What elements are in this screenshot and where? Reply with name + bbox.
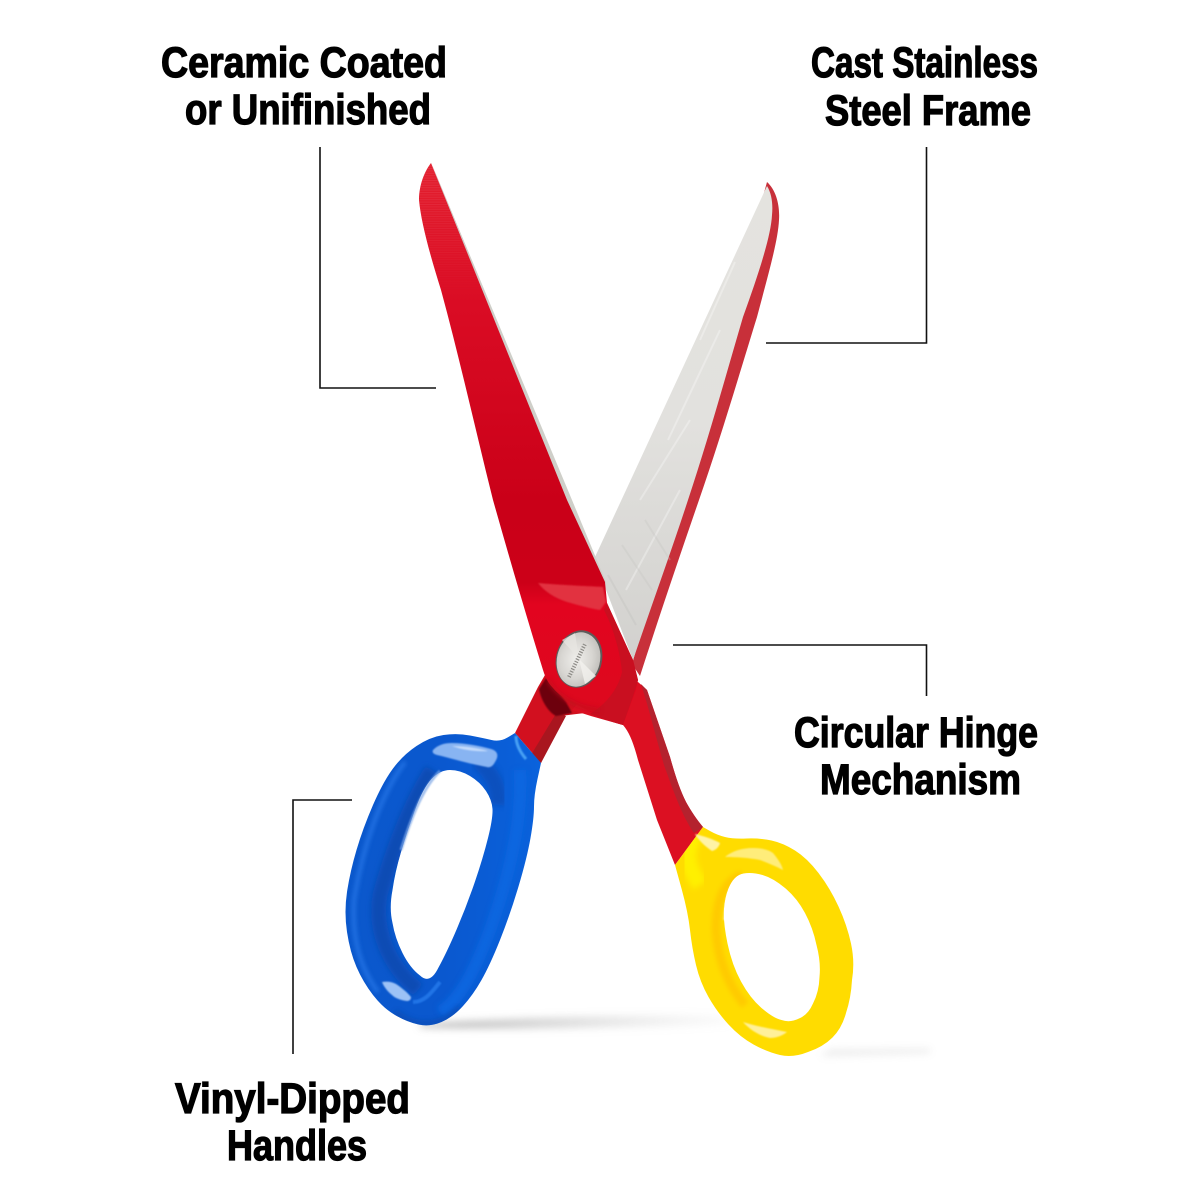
heading: vinyl-dipped: Vinyl-Dipped xyxy=(175,1075,410,1123)
left blade: red body and pivot xyxy=(419,163,638,725)
heading: cast stainless xyxy=(811,39,1038,135)
heading: ceramic coated: or Unifinished xyxy=(185,86,431,134)
right blade: red frame xyxy=(632,182,779,676)
blue handle xyxy=(346,733,541,1025)
leader line: cast stainless xyxy=(766,147,926,343)
blue hole soft edge xyxy=(401,771,440,850)
heading: ceramic coated: Ceramic Coated xyxy=(161,39,447,87)
ground shadow xyxy=(420,1016,930,1056)
heading: vinyl-dipped: Handles xyxy=(227,1122,367,1170)
yellow handle shading xyxy=(688,835,745,1005)
lower red arm xyxy=(572,682,703,865)
leader line: circular hinge xyxy=(673,645,926,696)
pivot shaded side xyxy=(590,603,638,725)
pivot lower bevel xyxy=(548,680,600,710)
leader line: vinyl handles xyxy=(293,800,352,1054)
heading: circular hinge: Circular Hinge xyxy=(794,709,1038,757)
heading: cast stainless: Cast Stainless xyxy=(811,39,1038,87)
steel brushed texture xyxy=(608,262,735,625)
hinge rivet xyxy=(550,625,608,693)
heading: circular hinge xyxy=(794,709,1038,804)
leader line: ceramic coated xyxy=(320,147,436,388)
blade tip ribs xyxy=(419,164,473,264)
yellow handle xyxy=(675,827,853,1056)
heading: vinyl-dipped xyxy=(175,1075,410,1170)
pivot highlight xyxy=(538,583,606,610)
right blade: steel face xyxy=(595,186,772,660)
heading: circular hinge: Mechanism xyxy=(820,756,1021,804)
heading: ceramic coated xyxy=(161,39,447,134)
left blade: steel edge xyxy=(431,162,606,590)
blue handle arm xyxy=(515,675,585,763)
scissors xyxy=(346,162,853,1056)
yellow handle highlights xyxy=(695,834,787,1038)
heading: cast stainless: Steel Frame xyxy=(825,87,1031,135)
blue handle highlights xyxy=(382,736,526,1001)
blue handle shading xyxy=(354,760,520,1024)
